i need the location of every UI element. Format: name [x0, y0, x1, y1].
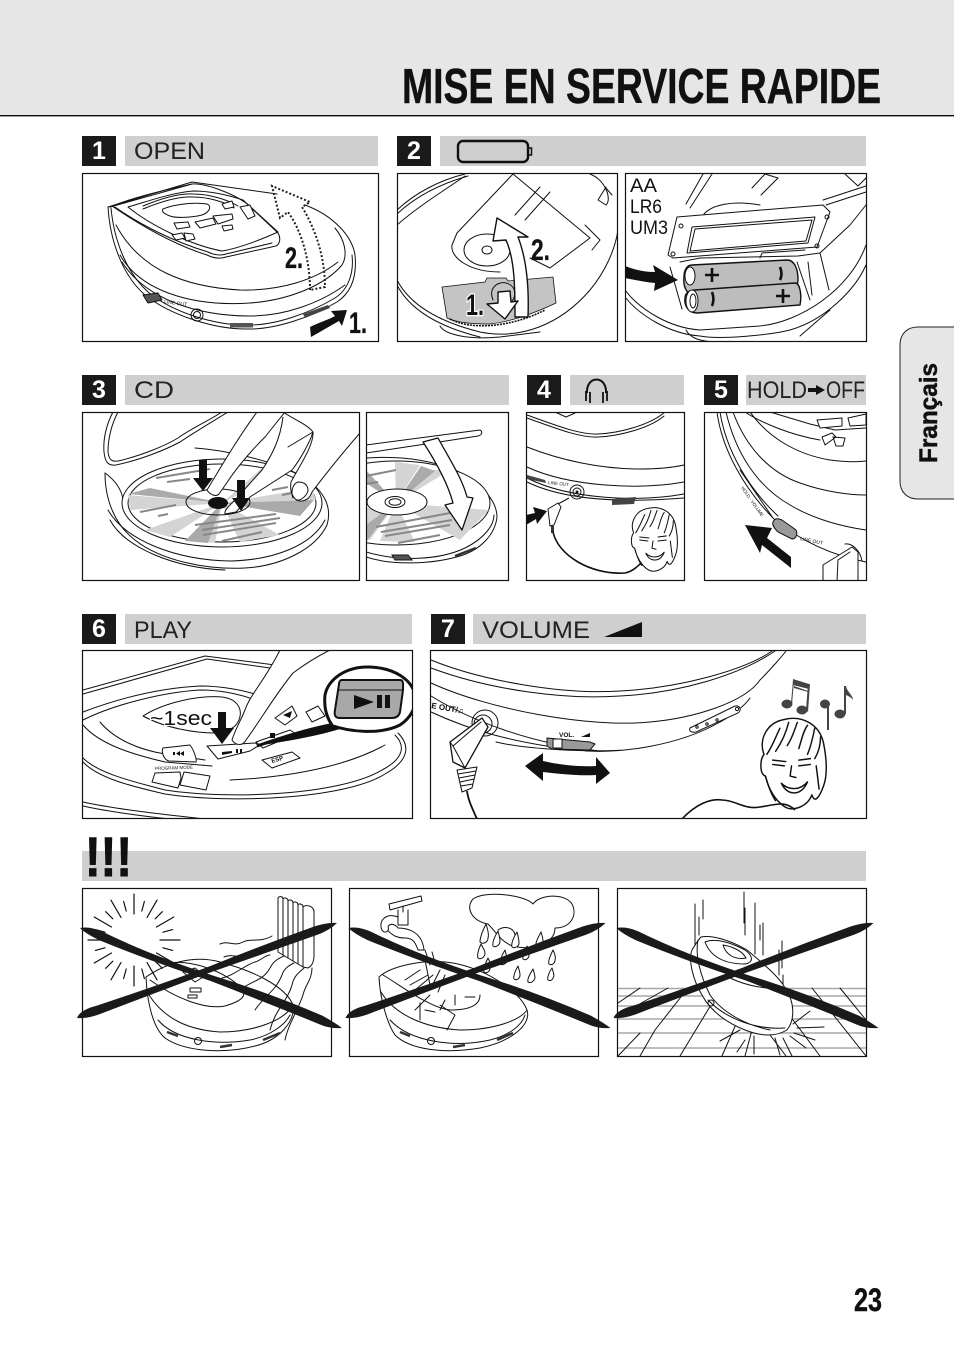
language side tab: Français — [915, 363, 943, 463]
step 7 heading: VOLUME — [482, 617, 590, 644]
step 6 heading: 6 — [92, 615, 106, 643]
size labels — [630, 176, 668, 239]
motion lines — [695, 892, 783, 995]
size labels: AA — [630, 176, 657, 197]
step 7 heading: 7 — [441, 615, 455, 643]
icon: headphones — [586, 380, 607, 403]
plug — [823, 547, 858, 581]
panel 6: play: ESP — [271, 756, 284, 765]
panel 4: headphones plug: LINE OUT — [548, 480, 569, 487]
header band — [0, 0, 954, 116]
music notes — [782, 679, 853, 730]
volume slider — [547, 738, 595, 750]
face — [631, 508, 677, 571]
magnifier — [257, 667, 415, 746]
sec label: ~1sec — [150, 708, 212, 730]
step 5 heading: 5 — [714, 376, 728, 404]
panel: water warning — [350, 888, 598, 1056]
panel 3a: insert CD — [103, 413, 359, 570]
panel 7: volume: E OUT/♫ — [431, 701, 464, 716]
panel 2a: battery cover: 2. — [531, 234, 550, 267]
step 2 heading — [397, 136, 866, 166]
step 1 heading — [82, 136, 378, 166]
step 3 heading: 3 — [92, 376, 106, 404]
player illustration: LINE OUT — [164, 299, 187, 308]
CD — [302, 461, 490, 545]
CD — [122, 459, 322, 547]
panel 4: headphones plug — [527, 413, 684, 574]
panel 5: hold off: LINE OUT — [800, 536, 823, 547]
buttons — [162, 745, 196, 762]
step 5 heading: HOLD — [747, 377, 807, 404]
panel 3b: close lid — [367, 430, 498, 564]
panel 5: hold off — [716, 413, 866, 580]
icon: tap — [389, 896, 422, 910]
language side tab — [900, 327, 954, 499]
black arrow — [310, 310, 347, 337]
jack socket and plug — [472, 710, 498, 736]
icon: volume wedge — [604, 622, 642, 637]
cable — [553, 532, 645, 573]
step 3 heading — [82, 375, 509, 405]
panel 5: hold off: HOLD · VOLUME — [740, 486, 765, 518]
size labels: UM3 — [630, 218, 668, 239]
size labels: LR6 — [630, 197, 662, 218]
panel 1: open the lid: 1. — [349, 307, 367, 340]
panel 7: volume — [431, 651, 853, 818]
finger — [232, 650, 330, 744]
step 2 heading: 2 — [407, 137, 421, 165]
plug — [548, 498, 569, 526]
step 3 heading: CD — [134, 377, 174, 404]
face — [761, 718, 826, 809]
black down arrow — [210, 712, 234, 744]
opened cover — [668, 205, 830, 258]
impact lines — [720, 1011, 824, 1056]
cable — [682, 800, 795, 819]
icon: arrow — [808, 385, 825, 395]
crossed-out X marks — [77, 923, 878, 1028]
icon: battery — [458, 141, 532, 162]
warning heading: !!! — [85, 825, 132, 888]
white curved arrow — [493, 218, 528, 317]
step 1 heading: OPEN — [134, 138, 205, 165]
warning heading — [82, 825, 866, 888]
panel 6: play — [83, 651, 412, 818]
panel: heat warning — [82, 888, 332, 1056]
step 7 heading — [431, 614, 866, 644]
icon: radiator — [278, 897, 314, 968]
icon: raindrops — [478, 924, 555, 983]
X mark: water — [346, 923, 610, 1028]
big white arrow — [423, 438, 473, 530]
double arrow — [525, 753, 610, 784]
display — [143, 697, 240, 733]
step 4 heading: 4 — [537, 376, 551, 404]
step 5 heading: OFF — [826, 377, 865, 404]
panel 2b: batteries — [626, 174, 866, 341]
player illustration — [108, 182, 355, 329]
arrows — [193, 460, 213, 491]
page number: 23 — [854, 1282, 882, 1318]
black arrow — [745, 525, 791, 568]
icon: player — [146, 959, 293, 1051]
panel 7: volume: VOL. — [559, 732, 574, 739]
grey cover — [442, 277, 556, 324]
step 1 heading: 1 — [92, 137, 106, 165]
X mark: heat — [77, 923, 342, 1028]
panel 6: play: PROGRAM MODE — [155, 765, 193, 771]
floor grid — [618, 988, 866, 1056]
panel 1: open the lid — [82, 174, 378, 342]
panel 1: open the lid: 2. — [285, 242, 303, 275]
dotted arrow — [272, 186, 325, 290]
icon: tilted player — [691, 937, 793, 1035]
icon: sun — [88, 894, 180, 986]
step 5 heading — [704, 375, 866, 405]
batteries — [684, 260, 798, 294]
black arrow — [526, 507, 547, 525]
step 6 heading: PLAY — [134, 617, 192, 644]
icon: player — [379, 962, 528, 1051]
black arrow — [625, 265, 678, 291]
panel 2a: battery cover: 1. — [466, 289, 484, 322]
fingers — [207, 412, 285, 495]
press arrow — [492, 283, 515, 301]
panel: impact warning — [618, 888, 866, 1056]
X mark: impact — [614, 923, 878, 1028]
icon: cloud — [470, 894, 574, 948]
step 4 heading — [527, 375, 684, 405]
panel 2a: battery cover — [398, 174, 617, 338]
step 6 heading — [82, 614, 412, 644]
